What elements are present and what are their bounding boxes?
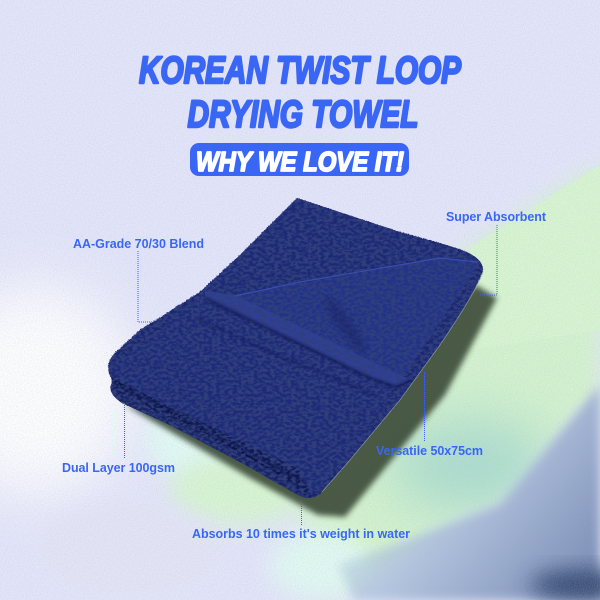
- title: KOREAN TWIST LOOP: [139, 50, 462, 92]
- title: [139, 50, 462, 136]
- towel upper panel: [206, 198, 338, 288]
- label: AA-Grade 70/30 Blend: [73, 237, 204, 322]
- label: Super Absorbent: Super Absorbent: [446, 210, 547, 224]
- label: Dual Layer 100gsm: [62, 403, 175, 475]
- label: Versatile 50x75cm: [376, 372, 483, 458]
- towel folded flap: [240, 259, 480, 375]
- towel: [100, 190, 490, 505]
- label: Dual Layer 100gsm: Dual Layer 100gsm: [62, 461, 175, 475]
- towel lower panel: [304, 456, 352, 498]
- label: AA-Grade 70/30 Blend: AA-Grade 70/30 Blend: [73, 237, 204, 251]
- label: Absorbs 10 times: Absorbs 10 times it's weight in water: [192, 527, 410, 541]
- towel texture: [100, 190, 490, 505]
- towel shadow: [125, 285, 497, 517]
- title: DRYING TOWEL: [188, 94, 418, 136]
- label: Versatile 50x75cm: Versatile 50x75cm: [376, 444, 483, 458]
- towel folded lower edge: [108, 376, 312, 499]
- label: Super Absorbent: [446, 210, 547, 295]
- subtitle badge: why we love it: WHY WE LOVE IT!: [196, 146, 404, 177]
